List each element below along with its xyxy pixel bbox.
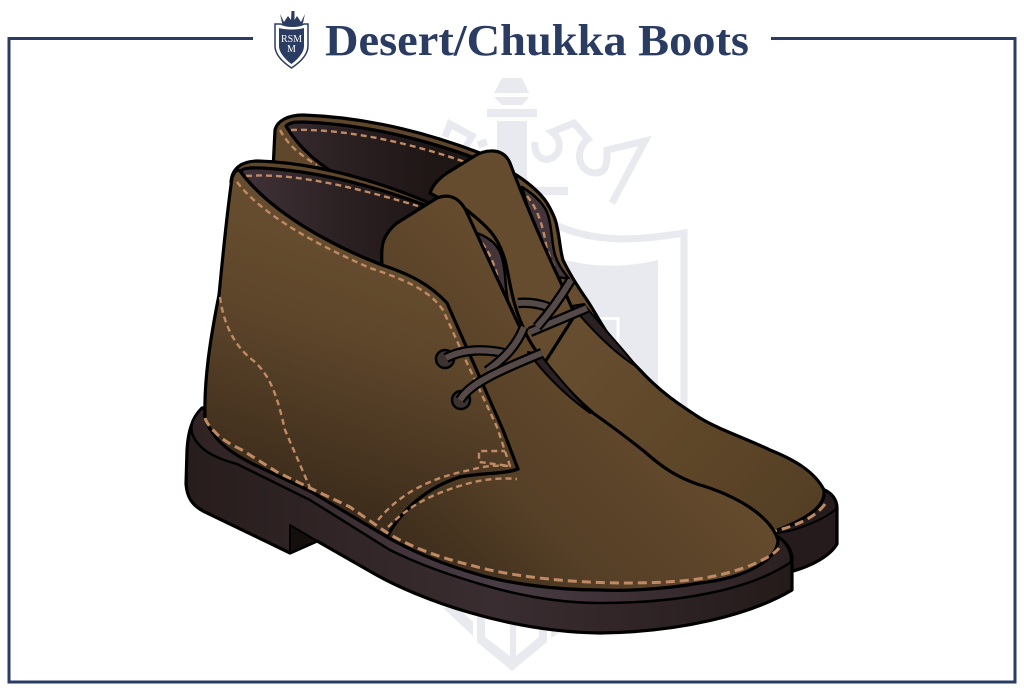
welt [191, 408, 791, 603]
crest tower [487, 78, 568, 195]
front sole [186, 400, 792, 633]
laces [436, 280, 587, 409]
title: Desert/Chukka Boots [325, 16, 749, 65]
upper stitching [220, 182, 517, 527]
heel breast [290, 525, 317, 553]
crest shield [443, 226, 684, 671]
rear lace loops [518, 303, 548, 307]
logo: shield emblem: M [287, 44, 296, 55]
front boot [186, 161, 792, 633]
rear wedge [572, 304, 637, 367]
front collar lining [240, 168, 430, 265]
rear stitching [775, 504, 825, 531]
rear collar [273, 115, 480, 200]
rear collar lining [286, 122, 475, 205]
toe seam [387, 469, 518, 537]
logo crown [280, 11, 305, 27]
eyelets [436, 350, 470, 409]
rear boot [273, 115, 837, 572]
front vamp [387, 207, 778, 590]
front lining stitch [246, 175, 418, 206]
rear slot [522, 187, 569, 279]
watermark crest [443, 78, 684, 671]
front wedge [528, 352, 590, 413]
rear collar stitch [280, 130, 317, 165]
front slot [477, 233, 514, 321]
rear tongue [430, 151, 575, 370]
crest crown curls [445, 123, 645, 203]
front quarter [205, 170, 518, 537]
logo: shield emblem [275, 11, 308, 68]
rear sole [740, 489, 837, 572]
welt stitching [205, 418, 779, 583]
front tongue [382, 196, 590, 440]
rear upper [500, 173, 824, 531]
front collar [231, 161, 432, 270]
rear stitching in lining [291, 130, 468, 163]
logo monogram: RSM [281, 34, 302, 45]
front lace loops [446, 350, 508, 358]
